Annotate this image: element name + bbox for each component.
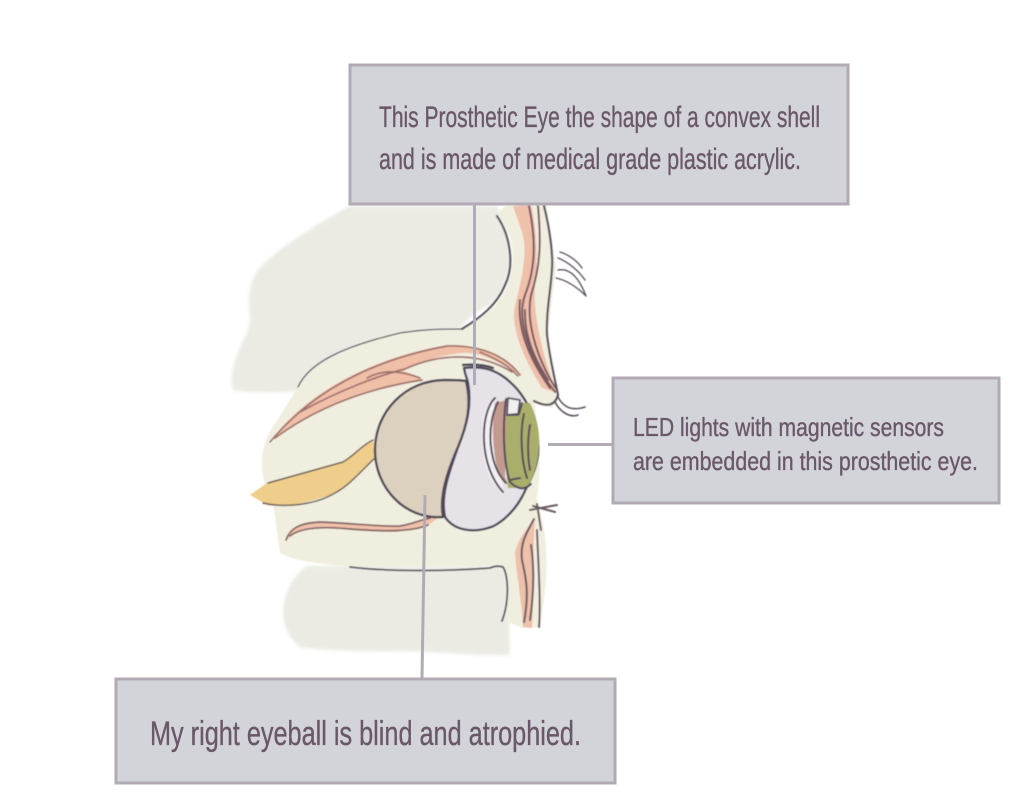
- leader line: prosthetic shell: [473, 204, 476, 385]
- lower eye muscle: [285, 518, 438, 542]
- callout text: LED lights with magnetic sensors: [633, 412, 944, 442]
- upper eye muscle: [270, 345, 522, 442]
- illustration: eye socket cross-section: [232, 205, 586, 655]
- callout: LED lights: [613, 378, 999, 503]
- callout text: My right eyeball is blind and atrophied.: [150, 715, 581, 753]
- optic nerve: [250, 440, 375, 506]
- callout text: This Prosthetic Eye the shape of a convex shell: [379, 101, 820, 134]
- lower grey tissue: [283, 566, 510, 655]
- callout: prosthetic eye material: [350, 65, 848, 204]
- atrophied eyeball: [375, 380, 469, 517]
- lower lid: [350, 504, 557, 628]
- LED and magnetic sensor assembly: [463, 365, 539, 492]
- brow muscle: [513, 205, 557, 393]
- sclera prosthetic shell: [444, 367, 538, 530]
- leader line: LED sensors: [548, 443, 612, 446]
- forehead skin outline and lashes: [298, 206, 586, 416]
- callout: blind eyeball: [116, 679, 615, 783]
- upper grey tissue: [232, 206, 511, 392]
- callout text: and is made of medical grade plastic acrylic.: [379, 143, 801, 176]
- cream tissue: [262, 206, 558, 628]
- leader line: blind eyeball: [422, 495, 425, 678]
